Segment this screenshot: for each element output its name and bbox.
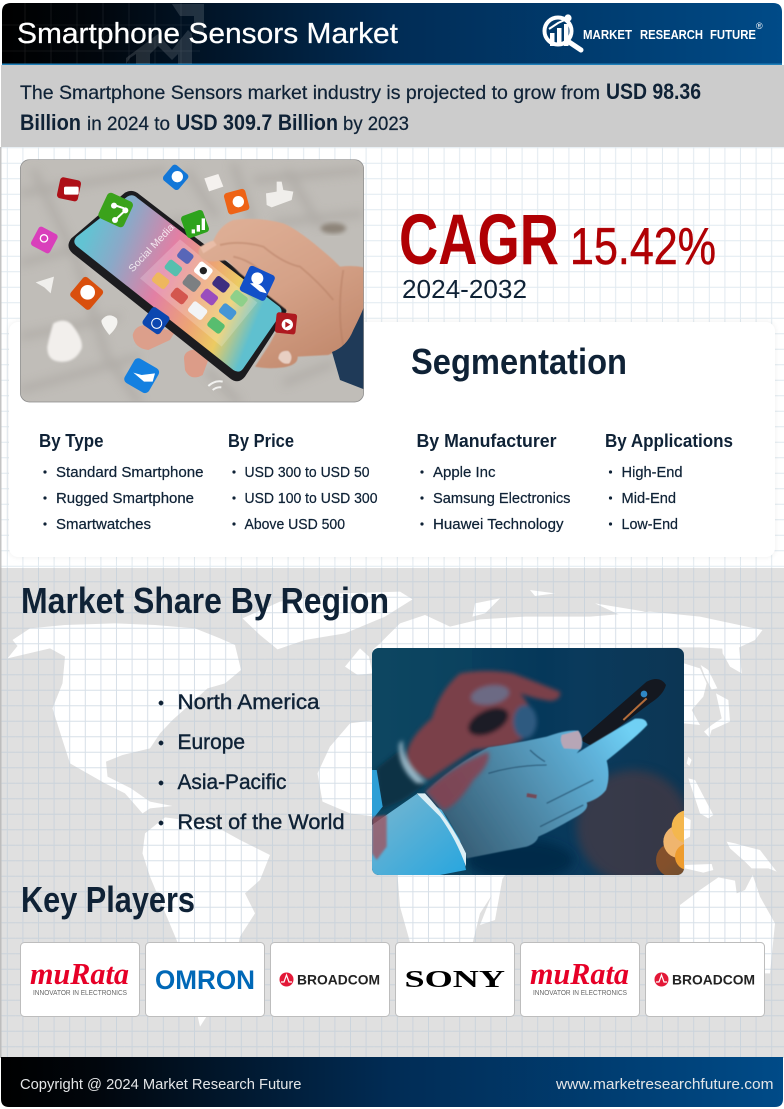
phone screen xyxy=(74,195,282,372)
logo card: Broadcom repeat: BROADCOM xyxy=(672,972,755,988)
website: www.marketresearchfuture.com xyxy=(555,1076,774,1093)
segmentation column: By Type: Rugged Smartphone xyxy=(56,491,194,507)
segmentation column: By Type: Smartwatches xyxy=(56,517,151,533)
region list: Rest of the World xyxy=(178,811,344,834)
segmentation column: By Applications: Mid-End xyxy=(622,491,676,507)
logo card: Sony xyxy=(396,942,514,1016)
intro text: by 2023 xyxy=(343,113,409,135)
region list: North America xyxy=(178,691,320,714)
segmentation column: By Applications: High-End xyxy=(622,465,682,481)
logo card: Broadcom xyxy=(270,942,390,1016)
segmentation column: By Price: Above USD 500 xyxy=(244,517,345,533)
back sleeve xyxy=(377,750,427,810)
icon: white pin xyxy=(101,315,117,335)
segmentation column: By Manufacturer: Huawei Technology xyxy=(433,517,564,533)
icon: wifi xyxy=(208,381,223,390)
logo card: muRata xyxy=(20,942,140,1016)
front sleeve xyxy=(372,794,466,875)
intro text xyxy=(20,79,701,135)
icon: pink search xyxy=(30,226,58,254)
panel: intro band xyxy=(1,65,784,147)
logo card: Sony: SONY xyxy=(404,967,505,993)
segmentation column: By Applications: By Applications xyxy=(605,430,733,451)
world map xyxy=(8,590,777,1027)
segmentation column: By Price xyxy=(228,430,378,533)
logo card: muRata repeat: muRata xyxy=(530,956,629,991)
CAGR callout: 2024-2032 xyxy=(402,274,527,304)
icon: blue cart xyxy=(124,358,160,394)
segmentation column: By Price: By Price xyxy=(228,430,294,451)
heading: Market Share By Region: Market Share By Region xyxy=(21,580,389,621)
icon: white paper plane xyxy=(36,277,54,293)
segmentation column: By Manufacturer: Samsung Electronics xyxy=(433,491,570,507)
hand xyxy=(199,219,364,368)
logo card: Broadcom: BROADCOM xyxy=(297,972,380,988)
back hand xyxy=(399,671,560,783)
pavement pattern xyxy=(20,163,363,403)
panel: header bar xyxy=(2,3,782,65)
app folder xyxy=(140,239,257,347)
bokeh lights xyxy=(656,810,684,875)
phone xyxy=(580,679,666,747)
segmentation column: By Applications: Low-End xyxy=(622,517,678,533)
icon: white heart xyxy=(47,321,82,362)
segmentation column: By Manufacturer: Apple Inc xyxy=(433,465,496,481)
segmentation column: By Manufacturer xyxy=(416,430,570,533)
logo: Market Research Future: FUTURE xyxy=(710,28,756,42)
title: Smartphone Sensors Market xyxy=(17,18,398,50)
logo card: muRata: muRata xyxy=(30,956,129,991)
CAGR callout xyxy=(399,201,716,304)
intro text: USD 309.7 Billion xyxy=(176,110,338,135)
icon: blue settings xyxy=(163,164,188,190)
fingers behind phone xyxy=(133,325,175,350)
copyright: Copyright @ 2024 Market Research Future xyxy=(20,1076,302,1093)
intro text: Billion xyxy=(20,110,81,135)
logo card: muRata: INNOVATOR IN ELECTRONICS xyxy=(33,990,127,997)
logo: Market Research Future xyxy=(544,14,763,50)
segmentation column: By Type: By Type xyxy=(39,430,104,451)
photo: hands using phone in blue light xyxy=(372,648,705,883)
icon: white mail xyxy=(204,174,223,191)
region list: Europe xyxy=(178,731,245,754)
logo: Market Research Future: RESEARCH xyxy=(640,28,703,42)
intro text: USD 98.36 xyxy=(606,79,701,104)
icon: white thumbs up xyxy=(266,182,293,207)
front hand xyxy=(426,718,647,858)
logo card: OMRON: OMRON xyxy=(155,965,255,995)
icon: orange camera xyxy=(223,188,250,215)
phone body xyxy=(68,191,287,381)
segmentation column: By Price: USD 100 to USD 300 xyxy=(244,491,378,507)
segmentation column: By Type xyxy=(39,430,204,533)
intro text: in 2024 to xyxy=(87,113,170,135)
logo card: OMRON xyxy=(146,942,264,1016)
icon: blue profile xyxy=(239,265,276,302)
sleeve xyxy=(332,308,364,390)
icon: green share xyxy=(98,192,133,228)
photo: hand holding phone with social media icons: Social Media xyxy=(127,222,177,275)
icon: blue at-sign xyxy=(142,307,170,334)
CAGR callout: CAGR xyxy=(399,201,559,280)
panel: segmentation card xyxy=(9,322,775,557)
photo: hand holding phone with social media icons xyxy=(20,159,364,403)
heading: Key Players: Key Players xyxy=(21,879,195,920)
segmentation column: By Type: Standard Smartphone xyxy=(56,465,204,481)
logo card: muRata repeat: INNOVATOR IN ELECTRONICS xyxy=(533,990,627,997)
logo card: Broadcom repeat xyxy=(646,942,764,1016)
logo: Market Research Future: ® xyxy=(756,21,763,31)
intro text: The Smartphone Sensors market industry is projected to grow from xyxy=(20,82,600,104)
CAGR callout: 15.42% xyxy=(570,218,716,276)
panel: region section background xyxy=(0,568,784,1058)
segmentation column: By Manufacturer: By Manufacturer xyxy=(416,430,556,451)
region list xyxy=(159,691,344,834)
icon: red chat xyxy=(56,177,82,202)
white grid background xyxy=(0,0,784,568)
segmentation column: By Applications xyxy=(605,430,733,533)
segmentation column: By Price: USD 300 to USD 50 xyxy=(244,465,370,481)
region list: Asia-Pacific xyxy=(178,771,286,794)
icon: orange chat xyxy=(70,276,104,310)
icon: faint growth arrow xyxy=(126,4,204,64)
logo: Market Research Future: MARKET xyxy=(583,28,632,42)
icon: green signal xyxy=(181,210,209,238)
panel: footer bar xyxy=(1,1057,783,1107)
logo card: muRata repeat xyxy=(520,942,640,1016)
icon: red play xyxy=(275,312,297,335)
heading: Segmentation: Segmentation xyxy=(411,341,627,382)
